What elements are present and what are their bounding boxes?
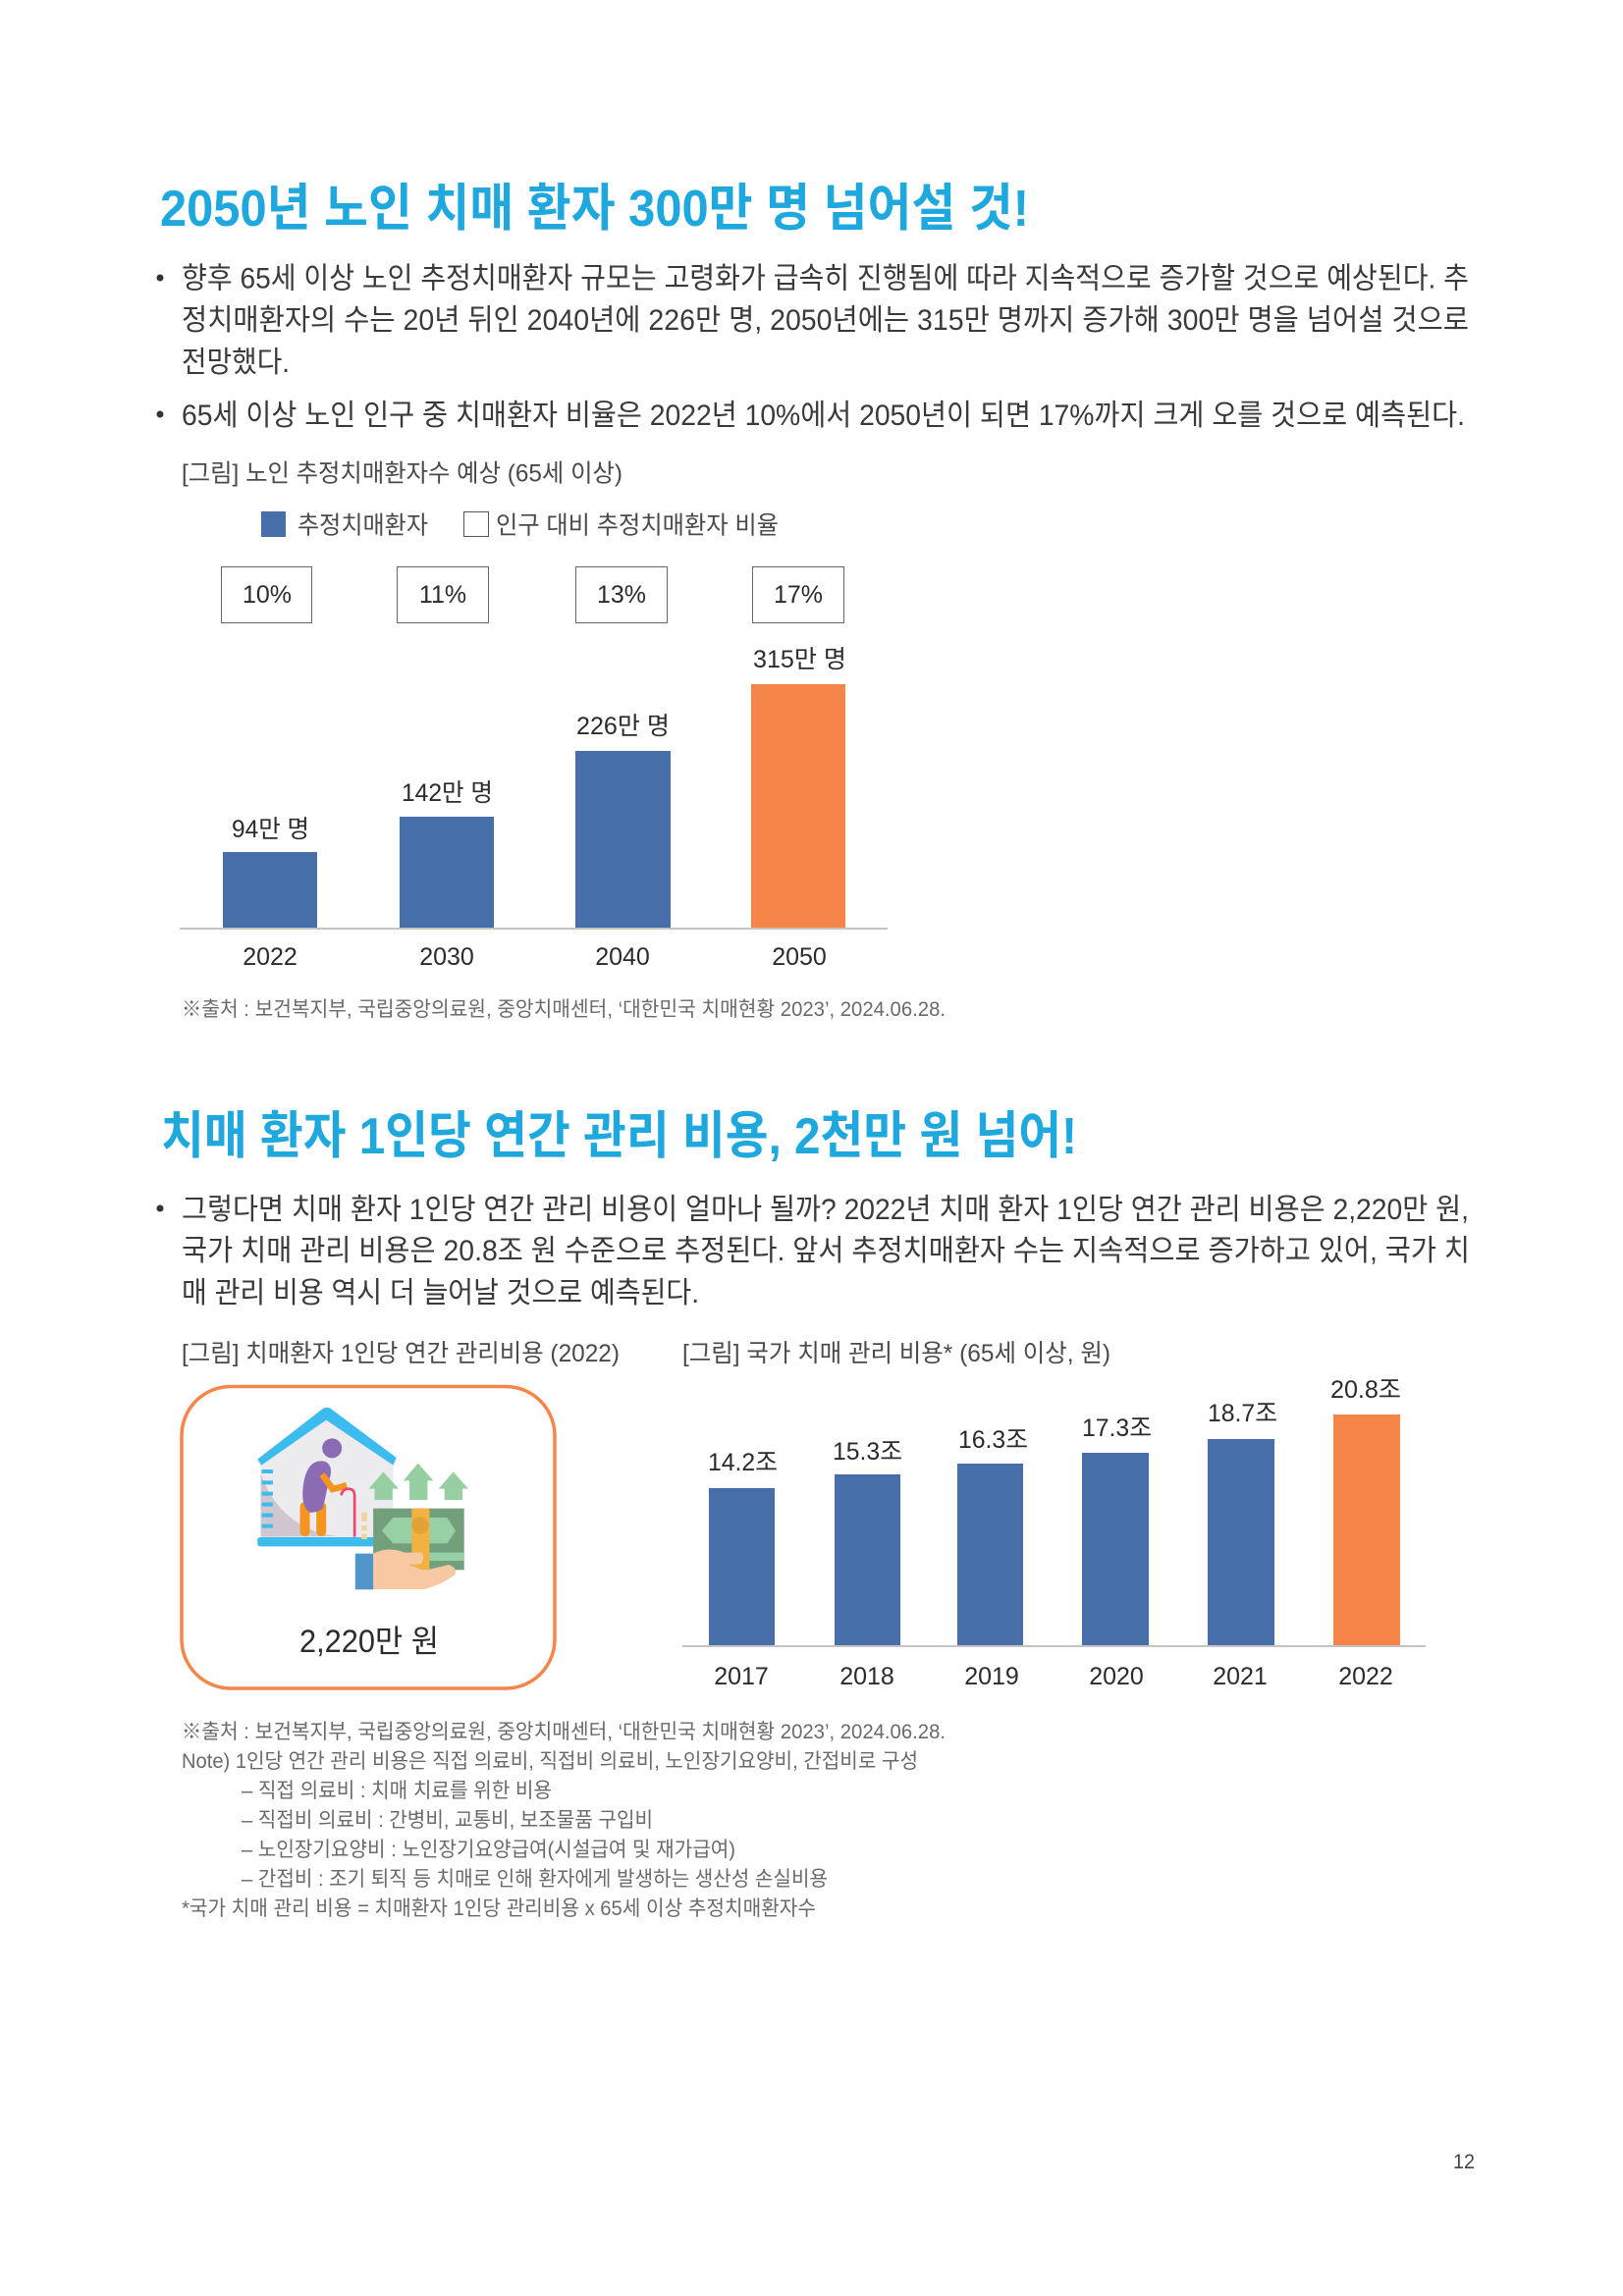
- value labels: 20.8조: [1330, 1376, 1401, 1404]
- year labels: 2050: [772, 943, 827, 971]
- year labels: [243, 943, 827, 971]
- bars: [180, 684, 888, 930]
- chart caption: cost per patient: [그림] 치매환자 1인당 연간 관리비용 (2022): [182, 1340, 620, 1367]
- year labels: 2040: [595, 943, 650, 971]
- legend: chart 1: [261, 511, 779, 540]
- bar chart: estimated dementia patients: [180, 567, 888, 971]
- legend: chart 1: 추정치매환자: [298, 512, 428, 540]
- value label: 2,220만 원: [299, 1624, 439, 1659]
- text block: section 1 bullets: 향후 65세 이상 노인 추정치매환자 규모는 고령화가 급속히 진행됨에 따라 지속적으로 증가할 것으로 예상된다. 추: [182, 263, 1469, 294]
- year labels: [714, 1663, 1393, 1690]
- year labels: 2022: [243, 943, 298, 971]
- year labels: 2020: [1089, 1663, 1144, 1690]
- value labels: [708, 1376, 1401, 1476]
- year labels: 2018: [839, 1663, 894, 1690]
- value labels: 315만 명: [753, 646, 846, 673]
- ratio boxes: 17%: [774, 581, 823, 609]
- text block: section 1 bullets: 전망했다.: [182, 347, 290, 379]
- legend: chart 1: 인구 대비 추정치매환자 비율: [496, 512, 779, 540]
- text block: section 2 bullet: 매 관리 비용 역시 더 늘어날 것으로 예측된다.: [182, 1277, 699, 1309]
- value labels: 94만 명: [232, 816, 309, 843]
- text block: section 2 bullet: [157, 1194, 1470, 1309]
- source note: chart 1: ※출처 : 보건복지부, 국립중앙의료원, 중앙치매센터, ‘대한민국 치매현황 2023’, 2024.06.28.: [182, 998, 946, 1021]
- footnotes: source and notes: – 직접 의료비 : 치매 치료를 위한 비용: [242, 1780, 552, 1802]
- value labels: 14.2조: [708, 1449, 778, 1476]
- value labels: 226만 명: [576, 713, 670, 740]
- year labels: 2017: [714, 1663, 769, 1690]
- text block: section 2 bullet: 그렇다면 치매 환자 1인당 연간 관리 비용이 얼마나 될까? 2022년 치매 환자 1인당 연간 관리 비용은 2,220만 원,: [182, 1194, 1469, 1226]
- ratio boxes: 10%: [243, 581, 292, 609]
- footnotes: source and notes: – 간접비 : 조기 퇴직 등 치매로 인해 환자에게 발생하는 생산성 손실비용: [242, 1868, 828, 1891]
- heading: section 2 title: 치매 환자 1인당 연간 관리 비용, 2천만 원 넘어!: [161, 1108, 1077, 1165]
- page number: 12: [1453, 2151, 1475, 2173]
- panel: cost per patient card: [182, 1386, 555, 1688]
- year labels: 2021: [1213, 1663, 1268, 1690]
- year labels: 2019: [964, 1663, 1019, 1690]
- footnotes: source and notes: – 노인장기요양비 : 노인장기요양급여(시설급여 및 재가급여): [242, 1839, 735, 1861]
- year labels: 2022: [1338, 1663, 1393, 1690]
- value labels: [232, 646, 846, 843]
- footnotes: source and notes: ※출처 : 보건복지부, 국립중앙의료원, 중앙치매센터, ‘대한민국 치매현황 2023’, 2024.06.28.: [182, 1721, 946, 1743]
- value labels: 16.3조: [958, 1426, 1028, 1454]
- text block: section 2 bullet: 국가 치매 관리 비용은 20.8조 원 수준으로 추정된다. 앞서 추정치매환자 수는 지속적으로 증가하고 있어, 국가 치: [182, 1235, 1470, 1267]
- bars: [682, 1415, 1426, 1647]
- footnotes: source and notes: *국가 치매 관리 비용 = 치매환자 1인당 관리비용 x 65세 이상 추정치매환자수: [182, 1897, 816, 1920]
- text block: section 1 bullets: 65세 이상 노인 인구 중 치매환자 비율은 2022년 10%에서 2050년이 되면 17%까지 크게 오를 것으로 예측된다.: [182, 400, 1465, 432]
- bar chart: national dementia cost: [682, 1376, 1426, 1690]
- value labels: 15.3조: [833, 1438, 902, 1466]
- chart caption: elderly dementia forecast: [그림] 노인 추정치매환자수 예상 (65세 이상): [182, 459, 622, 487]
- value labels: 142만 명: [402, 779, 493, 807]
- footnotes: source and notes: [182, 1721, 946, 1920]
- text block: section 1 bullets: [157, 263, 1469, 432]
- ratio boxes: [222, 567, 844, 622]
- year labels: 2030: [419, 943, 474, 971]
- ratio boxes: 11%: [419, 581, 466, 609]
- ratio boxes: 13%: [597, 581, 646, 609]
- footnotes: source and notes: Note) 1인당 연간 관리 비용은 직접 의료비, 직접비 의료비, 노인장기요양비, 간접비로 구성: [182, 1750, 918, 1773]
- value labels: 17.3조: [1082, 1415, 1152, 1442]
- chart caption: national cost: [그림] 국가 치매 관리 비용* (65세 이상, 원): [682, 1340, 1110, 1367]
- icon: elderly person in house with money: [257, 1408, 468, 1589]
- text block: section 1 bullets: 정치매환자의 수는 20년 뒤인 2040년에 226만 명, 2050년에는 315만 명까지 증가해 300만 명을 넘어설 것으로: [182, 304, 1469, 337]
- heading: section 1 title: 2050년 노인 치매 환자 300만 명 넘어설 것!: [160, 181, 1029, 238]
- footnotes: source and notes: – 직접비 의료비 : 간병비, 교통비, 보조물품 구입비: [242, 1809, 653, 1832]
- value labels: 18.7조: [1208, 1400, 1277, 1427]
